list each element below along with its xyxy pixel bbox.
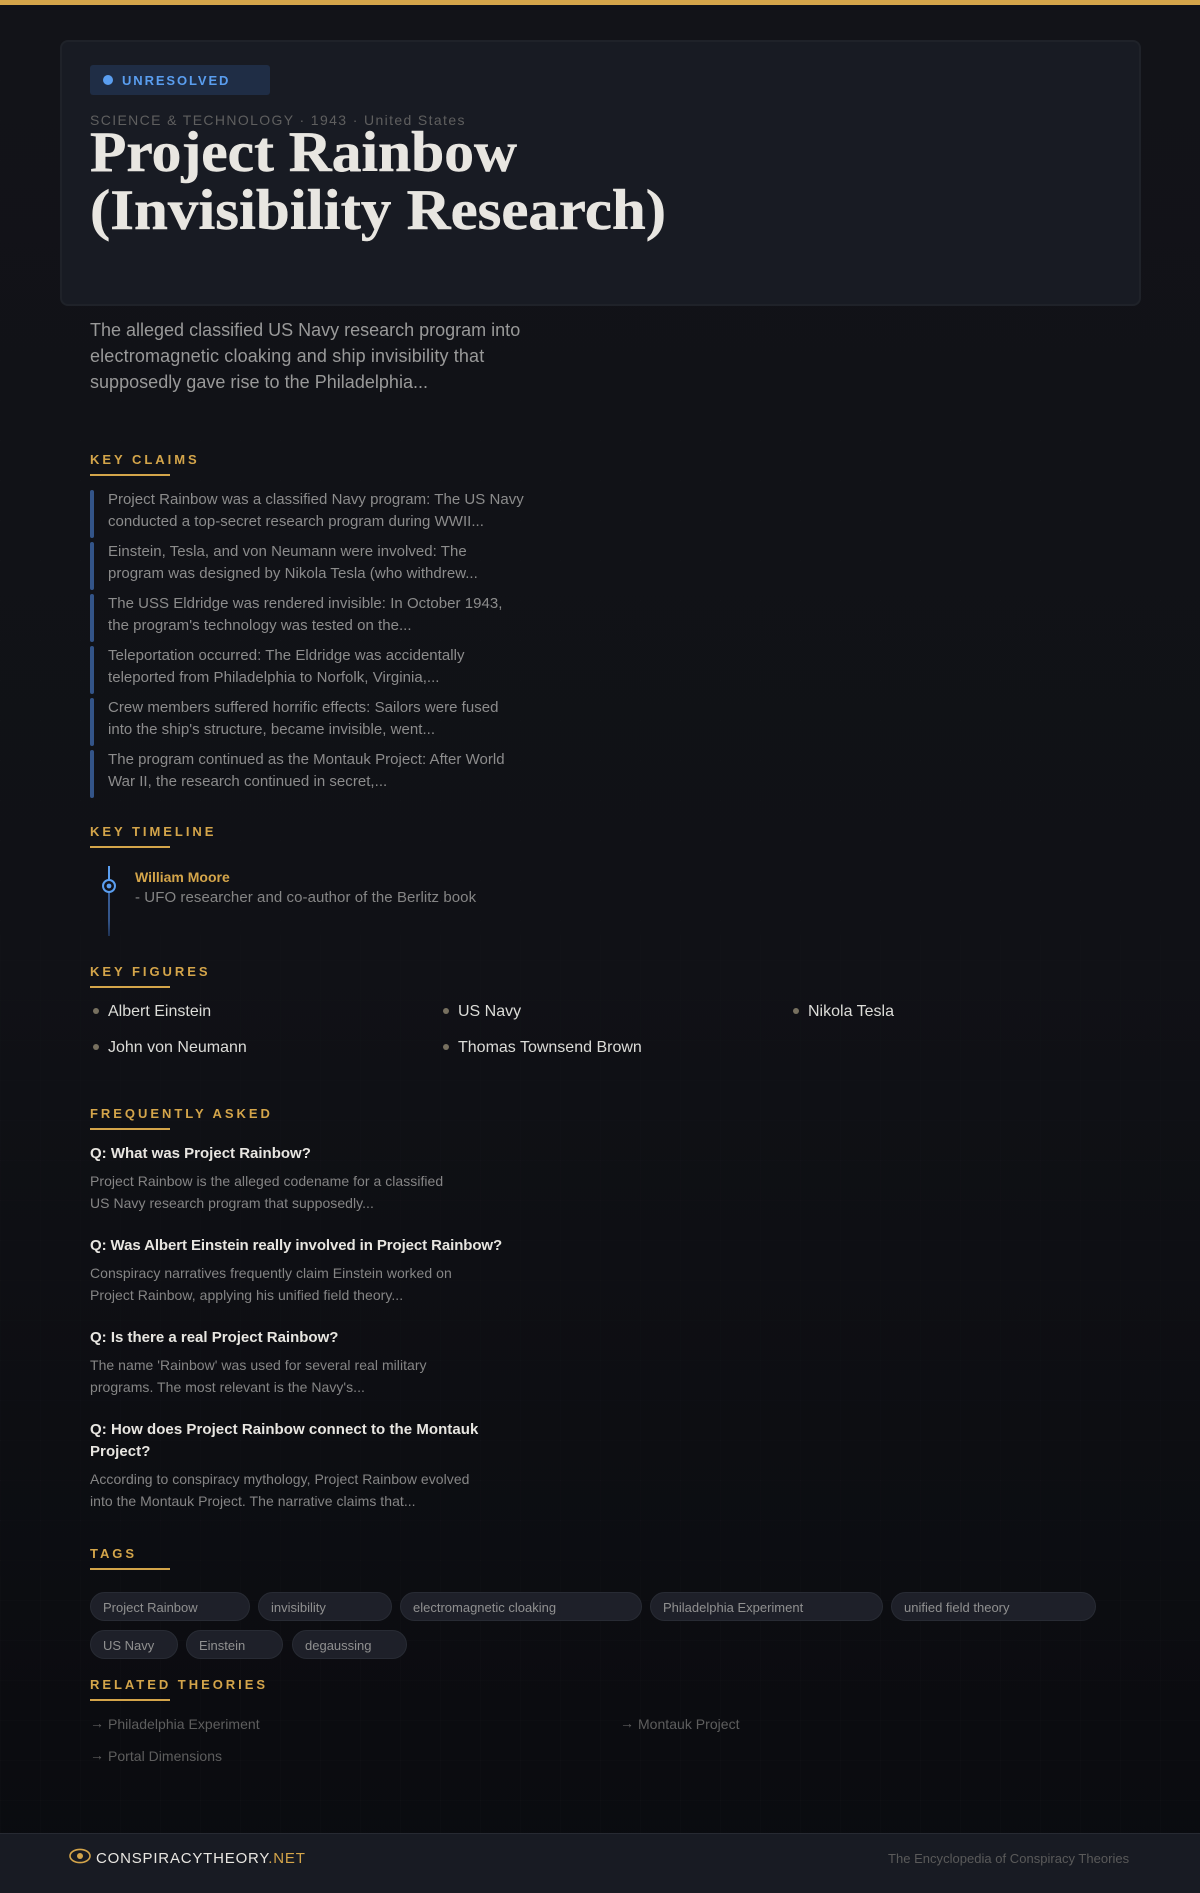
figure: US Navy: US Navy — [458, 1003, 521, 1020]
heading: key timeline: KEY TIMELINE — [90, 824, 216, 839]
panel: key figures — [90, 964, 894, 1056]
panel: key claims — [90, 452, 524, 798]
link: Philadelphia Experiment: → Philadelphia Experiment — [90, 1715, 260, 1732]
intro description: The alleged classified US Navy research program into — [90, 320, 520, 340]
answer 4: into the Montauk Project. The narrative claims that... — [90, 1493, 416, 1509]
claim 3: the program's technology was tested on the... — [108, 617, 412, 634]
heading: related theories: RELATED THEORIES — [90, 1677, 268, 1692]
top accent bar — [0, 0, 1200, 5]
intro description: supposedly gave rise to the Philadelphia... — [90, 372, 428, 392]
answer 1 — [90, 1173, 443, 1211]
icon: status dot — [103, 75, 113, 85]
tag: US Navy — [90, 1630, 178, 1659]
timeline entry description: - UFO researcher and co-author of the Berlitz book — [135, 889, 476, 906]
claim 1: Project Rainbow was a classified Navy program: The US Navy — [108, 491, 524, 508]
claim 1 — [90, 490, 524, 538]
claim 4: teleported from Philadelphia to Norfolk, Virginia,... — [108, 669, 440, 686]
answer 1: Project Rainbow is the alleged codename for a classified — [90, 1173, 443, 1189]
heading: key claims: KEY CLAIMS — [90, 452, 200, 467]
claim 2 — [90, 542, 478, 590]
question 4 — [90, 1421, 478, 1460]
tag: Einstein — [186, 1630, 283, 1659]
claim 2: Einstein, Tesla, and von Neumann were involved: The — [108, 543, 467, 560]
tag: Einstein: Einstein — [199, 1638, 245, 1653]
figure: Albert Einstein: Albert Einstein — [108, 1003, 211, 1020]
panel: frequently asked — [90, 1106, 502, 1509]
panel: related theories — [90, 1677, 740, 1764]
icon: timeline marker — [102, 879, 116, 893]
answer 1: US Navy research program that supposedly... — [90, 1195, 374, 1211]
intro description: electromagnetic cloaking and ship invisibility that — [90, 346, 484, 366]
tag: degaussing: degaussing — [305, 1638, 372, 1653]
category meta line: SCIENCE & TECHNOLOGY · 1943 · United States — [90, 112, 466, 128]
claim 6 — [90, 750, 505, 798]
footer tagline: The Encyclopedia of Conspiracy Theories — [888, 1851, 1129, 1866]
tag: electromagnetic cloaking: electromagnetic cloaking — [413, 1600, 556, 1615]
tag: Philadelphia Experiment: Philadelphia Experiment — [663, 1600, 803, 1615]
claim 5: Crew members suffered horrific effects: Sailors were fused — [108, 699, 499, 716]
link: Portal Dimensions: → Portal Dimensions — [90, 1747, 222, 1764]
claim 1: conducted a top-secret research program during WWII... — [108, 513, 484, 530]
tag: unified field theory: unified field theory — [904, 1600, 1010, 1615]
claim 5: into the ship's structure, became invisible, went... — [108, 721, 435, 738]
tag: invisibility — [258, 1592, 392, 1621]
claim 4 — [90, 646, 465, 694]
footer — [0, 1833, 1200, 1893]
answer 2: Project Rainbow, applying his unified field theory... — [90, 1287, 403, 1303]
tag: degaussing — [292, 1630, 407, 1659]
panel: tags — [90, 1546, 1096, 1659]
title: Project Rainbow — [90, 121, 517, 184]
claim 3 — [90, 594, 502, 642]
answer 3: The name 'Rainbow' was used for several real military — [90, 1357, 427, 1373]
claim 2: program was designed by Nikola Tesla (who withdrew... — [108, 565, 478, 582]
badge label: UNRESOLVED — [122, 73, 230, 88]
heading: frequently asked: FREQUENTLY ASKED — [90, 1106, 273, 1121]
title: (Invisibility Research) — [90, 179, 666, 242]
claim 5 — [90, 698, 499, 746]
question 1: Q: What was Project Rainbow? — [90, 1145, 311, 1162]
figure: Thomas Townsend Brown: Thomas Townsend Brown — [458, 1039, 642, 1056]
answer 4 — [90, 1471, 469, 1509]
answer 2: Conspiracy narratives frequently claim Einstein worked on — [90, 1265, 452, 1281]
heading: tags: TAGS — [90, 1546, 137, 1561]
answer 2 — [90, 1265, 452, 1303]
figure: John von Neumann: John von Neumann — [108, 1039, 247, 1056]
question 4: Project? — [90, 1443, 150, 1460]
tag: Project Rainbow — [90, 1592, 250, 1621]
heading: key figures: KEY FIGURES — [90, 964, 211, 979]
claim 6: War II, the research continued in secret,... — [108, 773, 387, 790]
timeline line — [108, 866, 110, 936]
answer 4: According to conspiracy mythology, Project Rainbow evolved — [90, 1471, 469, 1487]
icon: eye logo — [69, 1848, 91, 1864]
tag: Philadelphia Experiment — [650, 1592, 883, 1621]
answer 3: programs. The most relevant is the Navy's... — [90, 1379, 365, 1395]
site logo text: CONSPIRACYTHEORY.NET — [96, 1850, 306, 1867]
question 2: Q: Was Albert Einstein really involved in Project Rainbow? — [90, 1237, 502, 1254]
figure: Nikola Tesla: Nikola Tesla — [808, 1003, 894, 1020]
claim 6: The program continued as the Montauk Project: After World — [108, 751, 505, 768]
panel: key timeline — [90, 824, 476, 936]
tag: electromagnetic cloaking — [400, 1592, 642, 1621]
tag: invisibility: invisibility — [271, 1600, 326, 1615]
panel: header card — [60, 40, 1141, 306]
status badge — [90, 65, 270, 95]
tag: Project Rainbow: Project Rainbow — [103, 1600, 198, 1615]
timeline entry name: William Moore — [135, 869, 230, 885]
answer 3 — [90, 1357, 427, 1395]
question 4: Q: How does Project Rainbow connect to the Montauk — [90, 1421, 478, 1438]
intro description — [90, 320, 520, 392]
title — [90, 121, 666, 242]
tag: US Navy: US Navy — [103, 1638, 154, 1653]
question 3: Q: Is there a real Project Rainbow? — [90, 1329, 338, 1346]
tag: unified field theory — [891, 1592, 1096, 1621]
link: Montauk Project: → Montauk Project — [620, 1715, 740, 1732]
claim 3: The USS Eldridge was rendered invisible: In October 1943, — [108, 595, 502, 612]
claim 4: Teleportation occurred: The Eldridge was accidentally — [108, 647, 465, 664]
